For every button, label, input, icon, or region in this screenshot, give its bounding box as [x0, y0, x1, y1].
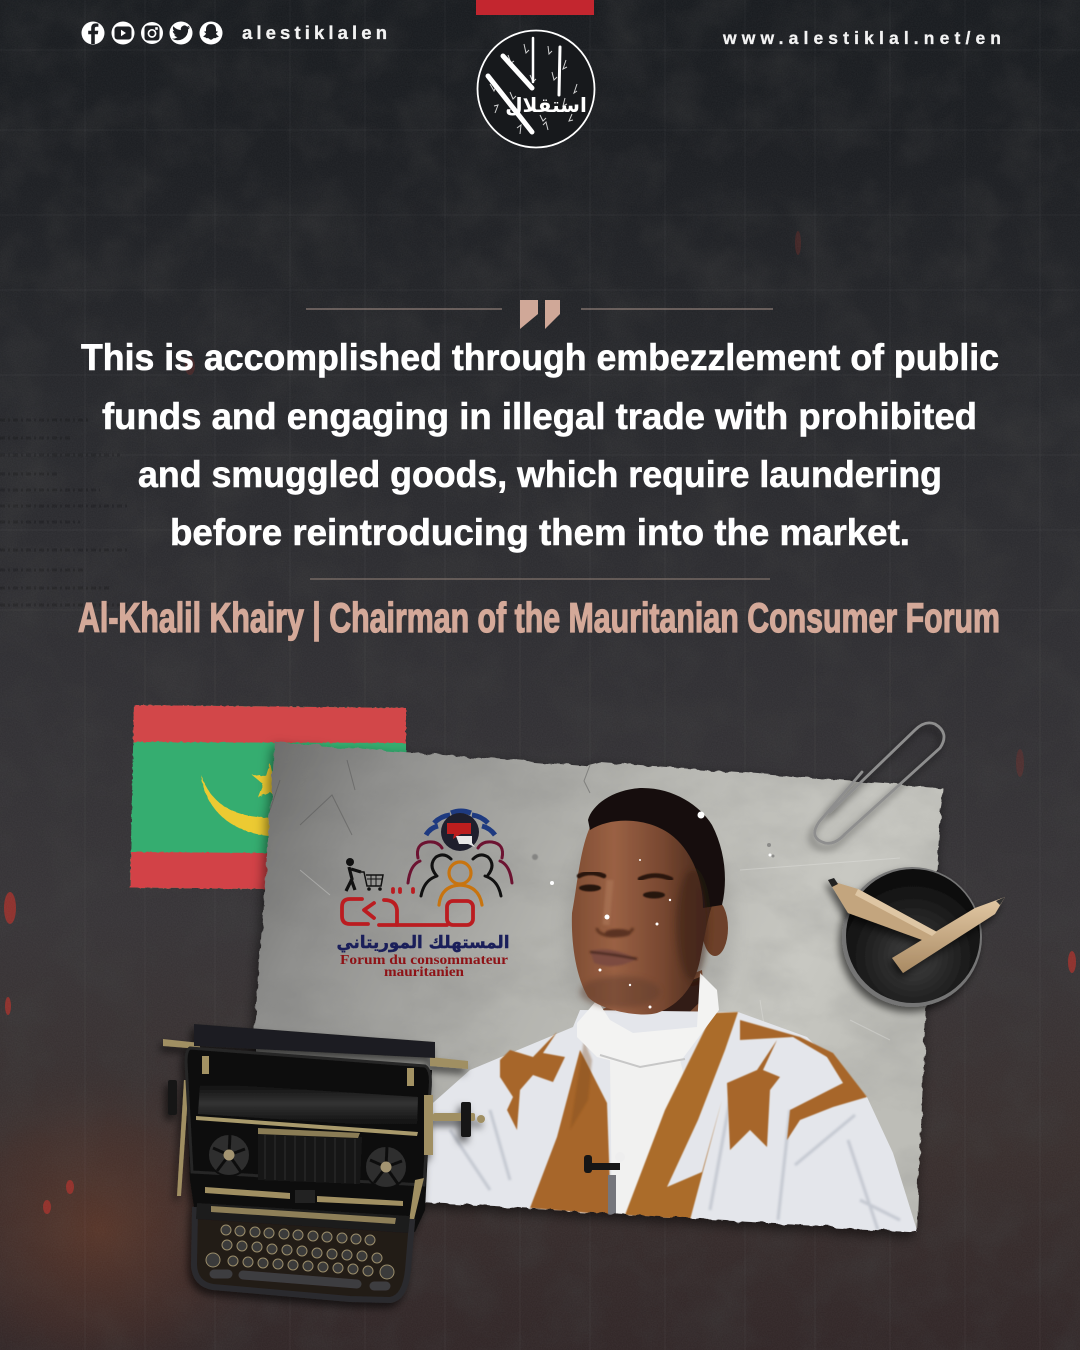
quote text: before reintroducing them into the market.: [170, 512, 910, 553]
logo: French name: Forum du consommateur: [340, 952, 508, 967]
typewriter keys: [206, 1225, 394, 1279]
typewriter space bar: [214, 1274, 386, 1286]
icon: quotation marks: [520, 300, 560, 329]
typewriter left ribbon reel: [208, 1134, 250, 1176]
top red tab: [476, 0, 594, 15]
paper photo card: [240, 735, 950, 1240]
social media icons: [82, 22, 222, 44]
icon: facebook: [82, 22, 104, 44]
logo: al-estiklal calligraphy seal: [478, 30, 594, 148]
quote text: This is accomplished through embezzlement of public: [81, 337, 999, 378]
logo: people group: [408, 842, 512, 905]
neck: [602, 970, 702, 1012]
icon: pencils: [828, 878, 1005, 973]
paper sheet: [240, 735, 950, 1240]
dust specks: [550, 812, 772, 1008]
logo: al-estiklal calligraphy seal: استقلال: [505, 93, 587, 117]
lapel microphone: [584, 1155, 620, 1173]
typewriter keyboard frame: [194, 1210, 412, 1300]
hair: [588, 788, 725, 908]
robe: [420, 1010, 920, 1240]
logo: French name: [340, 952, 508, 979]
ear: [704, 904, 728, 956]
quote text: [81, 337, 999, 553]
logo: Arabic name: المستهلك الموريتاني: [336, 933, 510, 953]
flag crescent: [201, 775, 290, 836]
face: [572, 820, 713, 1015]
typewriter chassis: [186, 1060, 432, 1232]
divider: [310, 578, 770, 580]
robe embroidery: [500, 1012, 867, 1220]
consumer forum logo: [336, 811, 512, 979]
icon: snapchat: [200, 22, 222, 44]
quote text: and smuggled goods, which require laundering: [138, 454, 942, 495]
head shadow: [566, 829, 735, 1010]
flag of Mauritania: [130, 705, 406, 890]
typewriter rods: [163, 1039, 485, 1196]
quote text: funds and engaging in illegal trade with prohibited: [102, 396, 977, 437]
typewriter right ribbon reel: [365, 1146, 407, 1188]
icon: youtube: [112, 22, 134, 44]
portrait: [420, 788, 920, 1240]
icon: paperclip: [815, 723, 944, 843]
typewriter knobs: [168, 1080, 471, 1137]
flag star: [252, 763, 290, 802]
website url: www.alestiklal.net/en: [722, 28, 1001, 48]
eyes: [579, 884, 665, 898]
logo: shopper with cart: [346, 858, 383, 891]
typewriter top bar: [194, 1024, 435, 1058]
typewriter platen: [198, 1083, 418, 1128]
icon: twitter: [170, 22, 192, 44]
eyebrows: [579, 873, 671, 879]
typewriter carriage body: [186, 1048, 430, 1185]
typewriter paper guides: [202, 1056, 414, 1086]
icon: instagram: [141, 22, 163, 44]
mouth: [590, 949, 637, 966]
nose: [597, 880, 633, 937]
typewriter type bars: [258, 1132, 362, 1184]
logo: Arabic wordmark: [342, 889, 473, 925]
social handle: alestiklalen: [242, 22, 387, 43]
typewriter front rail: [205, 1187, 403, 1206]
typewriter brass mechanism: [408, 1095, 433, 1228]
collar: [577, 973, 719, 1068]
logo: speech bubbles badge: [426, 811, 495, 851]
logo: French name: mauritanien: [384, 964, 465, 979]
typewriter: [163, 1024, 485, 1300]
quote ornament with dividers: [306, 300, 773, 329]
pencil cup: [842, 867, 982, 1007]
